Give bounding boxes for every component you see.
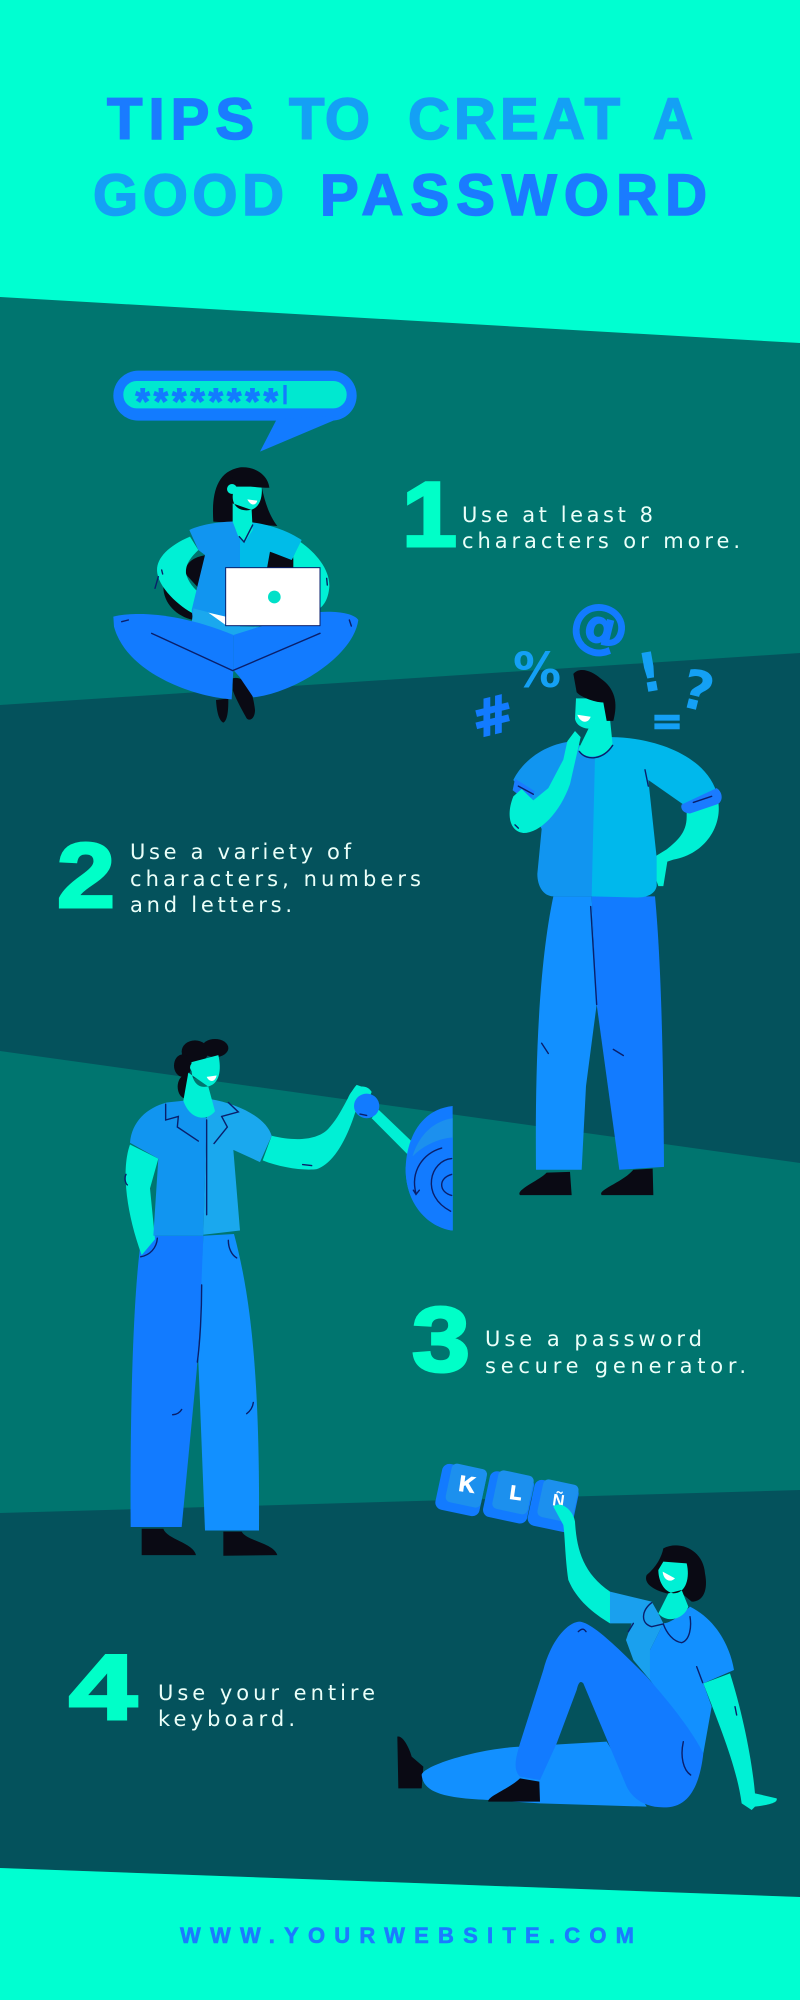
shirt: [130, 1101, 207, 1236]
step 4 number: 4: [69, 1637, 137, 1739]
title: TIPS: [107, 87, 254, 152]
flat leg: [422, 1742, 647, 1807]
floating password symbols: =: [651, 699, 683, 743]
title: PASSWORD: [320, 163, 707, 228]
keyboard keys K L Ñ: Ñ: [551, 1489, 566, 1511]
header band: [0, 0, 800, 343]
step 2 text: characters, numbers: [130, 867, 421, 891]
floating password symbols: ?: [675, 657, 720, 725]
footer band: [0, 1868, 800, 2000]
floating password symbols: !: [632, 640, 667, 706]
step 3 text: Use a password: [485, 1327, 702, 1351]
hair: [174, 1039, 228, 1099]
shirt: [189, 522, 240, 633]
hand on dial knob: [348, 1086, 379, 1118]
speech bubble with password field: [113, 371, 357, 452]
raised arm: [553, 1505, 610, 1623]
step 3 text: secure generator.: [485, 1354, 746, 1378]
illustration: woman with laptop and password bubble: [113, 371, 358, 723]
title: A: [653, 87, 693, 152]
neck and face: [658, 1562, 688, 1619]
title: TO: [289, 87, 370, 152]
shoe behind: [397, 1737, 423, 1788]
step 4 text: Use your entire: [158, 1681, 375, 1705]
background band: dark step 4: [0, 1490, 800, 1897]
footer website: WWW.YOURWEBSITE.COM: [180, 1923, 634, 1948]
shoes: [216, 678, 255, 723]
keyboard keys K L Ñ: L: [508, 1483, 523, 1505]
shirt: [610, 1592, 663, 1680]
step 2 text: Use a variety of: [130, 840, 352, 864]
neck, face: [183, 1055, 220, 1118]
floating password symbols: %: [513, 643, 561, 699]
arms: [126, 1085, 367, 1255]
clothing lines: [578, 1603, 737, 1775]
shirt: [513, 741, 595, 896]
floating password symbols: [466, 586, 720, 750]
bent leg: [516, 1622, 703, 1807]
keyboard keys K L Ñ: K: [457, 1471, 477, 1498]
shoes: [519, 1169, 653, 1195]
illustration: man turning dial: [125, 1039, 453, 1556]
step 4 text: [158, 1681, 375, 1731]
step 2 text: and letters.: [130, 893, 292, 917]
illustration: sitting woman pressing keys: [397, 1463, 777, 1810]
cuffs: [513, 779, 722, 813]
supporting arm: [703, 1673, 777, 1810]
right arm: [653, 802, 719, 886]
trousers: [131, 1236, 203, 1527]
step 1 text: characters or more.: [462, 529, 740, 553]
floating password symbols: #: [466, 683, 520, 750]
step 3 number: 3: [412, 1289, 470, 1391]
background band: dark step 2: [0, 653, 800, 1163]
shirt and trouser lines: [125, 1102, 367, 1415]
illustration: thinking man: [510, 670, 722, 1195]
dial with handle: [372, 1106, 453, 1231]
step 3 text: [485, 1327, 746, 1378]
laptop: [208, 568, 320, 626]
trousers: [536, 896, 597, 1170]
floating password symbols: @: [563, 586, 636, 666]
shoe front: [488, 1778, 540, 1802]
step 2 number: 2: [57, 825, 115, 927]
face and neck: [233, 487, 262, 543]
speech bubble with password field: ********: [135, 380, 278, 422]
crossed legs: [113, 614, 233, 699]
head and neck: [575, 698, 613, 757]
title: GOOD: [93, 163, 284, 228]
shoes: [142, 1529, 277, 1556]
back hair shapes: [163, 467, 298, 620]
step 1 text: Use at least 8: [462, 503, 653, 527]
hair: [646, 1545, 706, 1602]
arms: [157, 537, 329, 615]
step 1 number: 1: [402, 464, 457, 566]
left arm and hand: [510, 731, 581, 833]
creases: [515, 745, 712, 1056]
title: CREAT: [408, 87, 620, 152]
keyboard keys K L Ñ: [434, 1463, 580, 1534]
step 2 text: [130, 840, 421, 917]
title: [93, 87, 707, 228]
step 4 text: keyboard.: [158, 1707, 295, 1731]
step 1 text: [462, 503, 740, 553]
